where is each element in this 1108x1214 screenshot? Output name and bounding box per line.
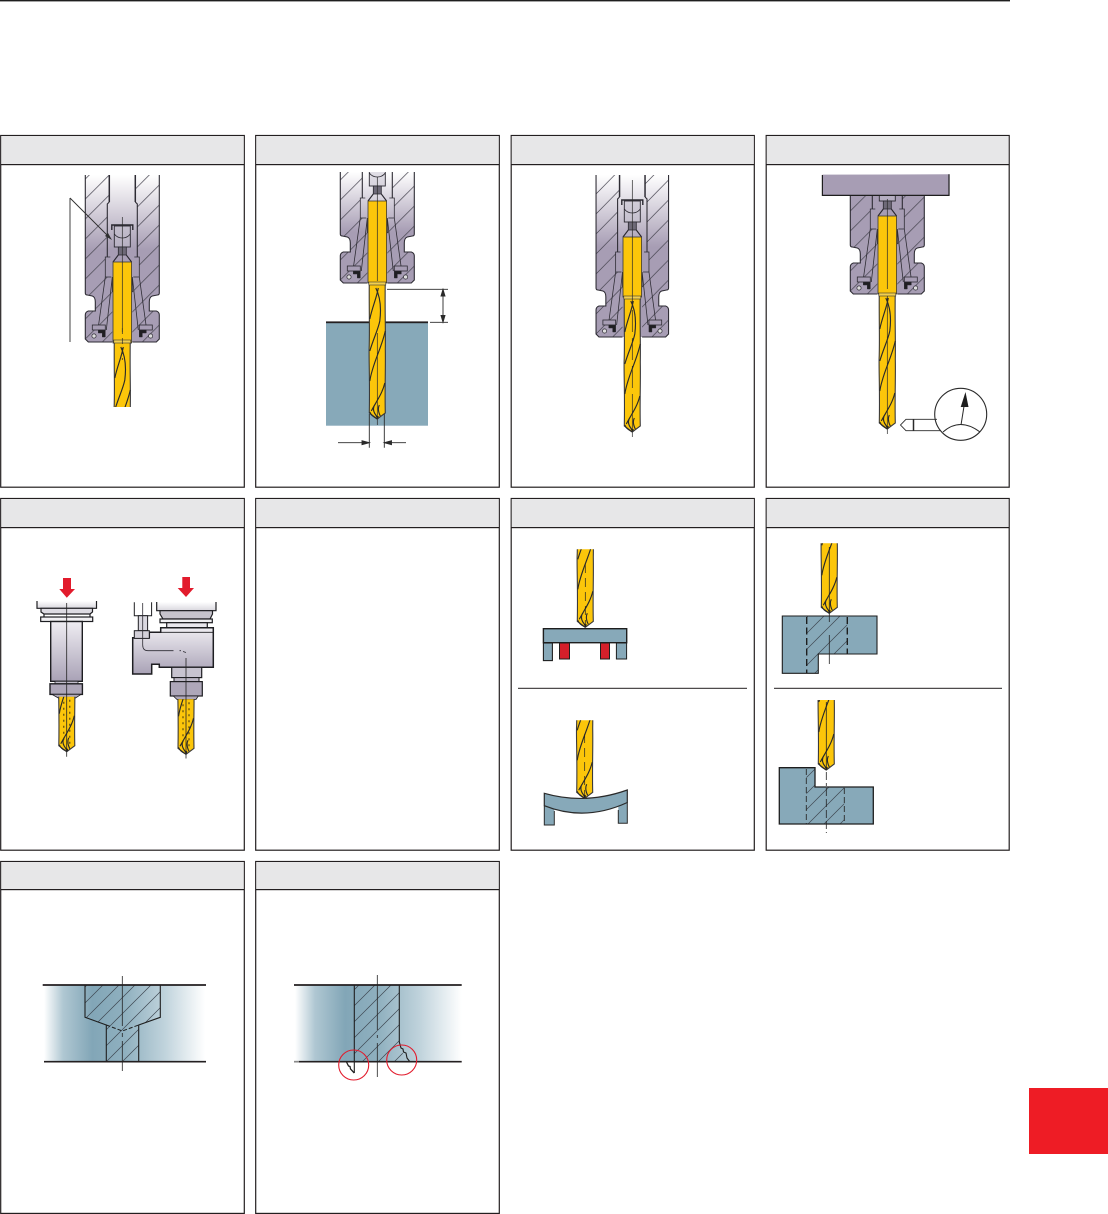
centre line: [376, 975, 378, 1077]
workpiece block: [326, 322, 428, 426]
arrow: left tool down: [59, 578, 75, 598]
angled tool: [133, 602, 216, 700]
straight tool: [37, 601, 96, 699]
upper outline: [782, 616, 877, 673]
callout circle left: [339, 1050, 369, 1080]
bent plate: [544, 790, 627, 825]
panel: retracted drill in holder: [511, 136, 754, 487]
upper hole edges: [807, 617, 847, 673]
divider: [518, 688, 747, 689]
straight tool centre line: [66, 603, 68, 757]
callout circle right: [387, 1045, 417, 1075]
header rule: [766, 164, 1010, 165]
section tab: [1029, 1088, 1108, 1154]
straight tool drill: [58, 696, 76, 752]
header rule: [1, 889, 244, 890]
supported plate: [543, 629, 627, 661]
header rule: [766, 527, 1010, 528]
holder and drill: [850, 196, 925, 434]
header rule: [512, 527, 754, 528]
panel: stepped through hole: [1, 862, 244, 1213]
bent plate drill: [576, 720, 594, 799]
lower hole edges: [806, 769, 844, 824]
header bar: [767, 499, 1009, 527]
lower centre line: [825, 702, 827, 770]
bent plate centre line: [584, 734, 586, 798]
centre line: [121, 976, 123, 1071]
header rule: [256, 889, 499, 890]
surfaces: [294, 985, 462, 1062]
top rule: [0, 0, 1010, 1]
upper hatching: [807, 616, 847, 673]
angled tool coolant channel: [143, 603, 186, 652]
spindle plate: [822, 174, 950, 196]
workpiece band: [44, 985, 205, 1062]
diameter dimension: [338, 414, 406, 448]
upper centre line: [828, 547, 830, 664]
supported plate drill: [576, 549, 594, 628]
header bar: [1, 499, 244, 527]
through hole hatching: [354, 985, 406, 1062]
depth dimension: [387, 289, 448, 322]
lower drill: [818, 700, 835, 771]
upper drill: [820, 543, 838, 614]
hole walls: [354, 985, 410, 1073]
drill point dashes: [106, 1025, 139, 1031]
lower centre line below: [825, 772, 827, 833]
header rule: [512, 164, 754, 165]
header bar: [512, 499, 754, 527]
upper workpiece: [782, 616, 877, 673]
workpiece band: [295, 985, 462, 1062]
header rule: [1, 527, 244, 528]
holder and drill: [595, 167, 669, 437]
header bar: [256, 136, 499, 164]
leader arrowhead: [105, 233, 112, 240]
dial gauge: [900, 388, 987, 440]
panel: tool holder with leader: [1, 136, 244, 487]
stepped hole hatching: [85, 985, 160, 1062]
header bar: [767, 136, 1009, 164]
surface lead-in: [294, 1061, 299, 1063]
holder and drill: [84, 175, 160, 407]
angled tool drill: [177, 699, 195, 755]
panel: breakthrough burr: [256, 862, 499, 1213]
panel: empty: [256, 498, 499, 850]
lower outline: [779, 768, 873, 824]
header bar: [1, 136, 244, 164]
header bar: [512, 136, 754, 164]
supported plate centre line: [584, 564, 586, 627]
angled tool centre line: [185, 658, 187, 758]
workpiece surface: [326, 321, 428, 323]
panel: drill depth and workpiece: [256, 113, 499, 487]
header bar: [256, 862, 499, 889]
surfaces: [43, 985, 206, 1062]
divider: [774, 688, 1002, 689]
panel: plate support and bending: [511, 487, 754, 850]
lower workpiece: [779, 768, 873, 824]
panel: runout gauge: [766, 124, 1010, 487]
exit burr: [346, 1062, 354, 1073]
panel: straight and angled tool: [1, 498, 244, 850]
panel: stepped workpieces: [766, 473, 1010, 850]
leader line: [70, 198, 110, 342]
header bar: [1, 862, 244, 889]
holder and drill: [340, 172, 415, 425]
stepped hole outline: [85, 985, 160, 1062]
header rule: [256, 527, 499, 528]
header bar: [256, 499, 499, 527]
lower hatching: [806, 768, 844, 824]
header rule: [1, 164, 244, 165]
header rule: [256, 164, 499, 165]
spindle plate edge: [822, 174, 949, 195]
arrow: right tool down: [178, 577, 194, 597]
